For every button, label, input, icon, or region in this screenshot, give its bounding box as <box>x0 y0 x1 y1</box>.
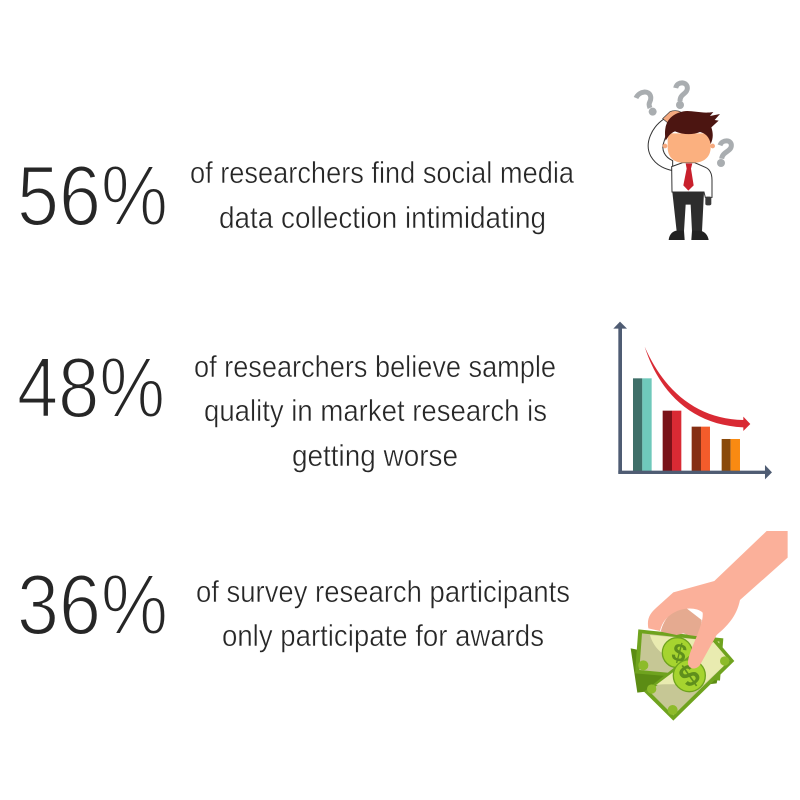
stat row: 56% <box>17 149 575 244</box>
axes <box>613 322 772 479</box>
stat row: 48% <box>17 341 556 473</box>
dollar signs: $ <box>669 638 690 669</box>
text block: social media statement: of researchers find social media <box>190 155 575 190</box>
text block: survey participants statement <box>196 574 570 653</box>
finger behind note <box>661 608 702 637</box>
text block: social media statement <box>190 155 575 235</box>
text block: sample quality statement: getting worse <box>292 438 458 473</box>
icon: confused man with question marks <box>636 83 731 240</box>
number: 56%: 56% <box>17 149 168 244</box>
number: 48%: 48% <box>17 341 165 436</box>
banknote: front <box>644 637 734 721</box>
number: 36%: 36% <box>17 558 168 653</box>
text block: sample quality statement: quality in market research is <box>204 393 547 428</box>
text block: social media statement: data collection intimidating <box>219 200 546 235</box>
text block: survey participants statement: of survey research participants <box>196 574 570 609</box>
icon: hand holding money <box>631 531 788 721</box>
text block: sample quality statement <box>194 349 556 473</box>
text block: survey participants statement: only participate for awards <box>222 618 544 653</box>
dollar signs <box>669 638 706 695</box>
arrow: downward trend <box>645 347 750 431</box>
icon: declining bar chart with arrow <box>613 322 772 479</box>
bars <box>633 378 740 471</box>
banknote: middle <box>635 629 723 681</box>
dollar signs: $ <box>673 657 706 695</box>
text block: sample quality statement: of researchers believe sample <box>194 349 556 384</box>
banknote: back <box>631 648 720 693</box>
hand and arm <box>648 531 788 668</box>
stat row: 36% <box>17 558 570 653</box>
